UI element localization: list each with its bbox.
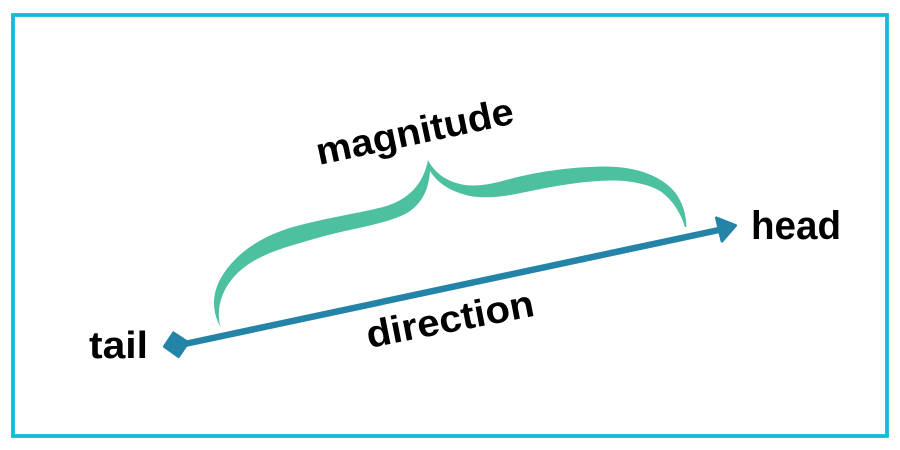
label: head: head [751, 204, 841, 248]
arrow shaft [180, 228, 726, 345]
arrow tail diamond [164, 333, 188, 356]
direction arrow [164, 218, 736, 356]
label: magnitude: magnitude [312, 91, 517, 174]
label: direction: direction [363, 283, 538, 357]
magnitude brace [214, 160, 686, 327]
label: tail: tail [89, 325, 148, 367]
arrow head [716, 218, 736, 241]
